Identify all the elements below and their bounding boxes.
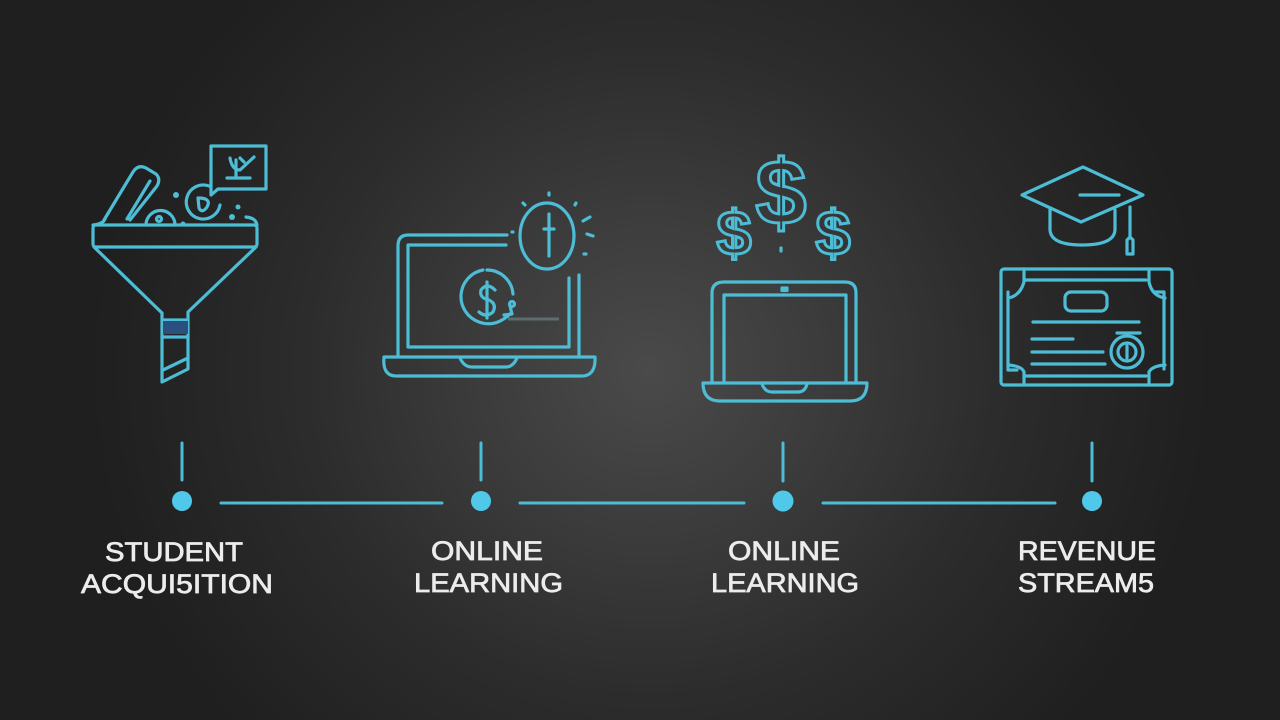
- particles: [173, 192, 240, 226]
- dollar signs: $: [815, 199, 851, 269]
- label: online learning second: ONLINE: [728, 536, 840, 566]
- speech bubble with chart: [211, 146, 266, 195]
- label: revenue streams: REVENUE: [1018, 536, 1156, 566]
- timeline: [172, 443, 1102, 512]
- label: student acquisition: [81, 537, 273, 599]
- certificate: [1001, 269, 1172, 385]
- dollar signs: $: [716, 199, 752, 269]
- currency cycle: [461, 270, 514, 324]
- icon: funnel with marketing items: [93, 146, 266, 382]
- label: student acquisition: STUDENT: [105, 537, 243, 567]
- graduation cap: [1022, 167, 1143, 254]
- label: online learning: ONLINE: [431, 536, 543, 566]
- light rays: [512, 193, 593, 254]
- label: online learning second: [711, 536, 859, 598]
- label: online learning: [414, 536, 563, 598]
- label: student acquisition: ACQUI5ITION: [81, 569, 273, 599]
- pencil: [104, 167, 159, 220]
- connectors: [182, 443, 1092, 503]
- faint text line: [508, 318, 559, 320]
- label: online learning: LEARNING: [414, 568, 563, 598]
- laptop: [703, 282, 867, 401]
- label: revenue streams: [1018, 536, 1156, 598]
- label: revenue streams: STREAM5: [1018, 568, 1154, 598]
- icon: graduation cap and certificate: [1001, 167, 1172, 385]
- light bulb: [520, 203, 574, 269]
- icon: laptop with idea and currency: [384, 193, 595, 376]
- funnel neck band: [163, 321, 188, 334]
- icon: laptop with dollar signs: [703, 142, 867, 401]
- label: online learning second: LEARNING: [711, 568, 859, 598]
- coins and dots: [146, 185, 220, 225]
- dollar signs: $: [755, 142, 807, 244]
- step markers: [172, 490, 1102, 512]
- funnel body: [93, 217, 257, 382]
- laptop frame: [384, 235, 595, 376]
- dollar signs: [716, 142, 851, 269]
